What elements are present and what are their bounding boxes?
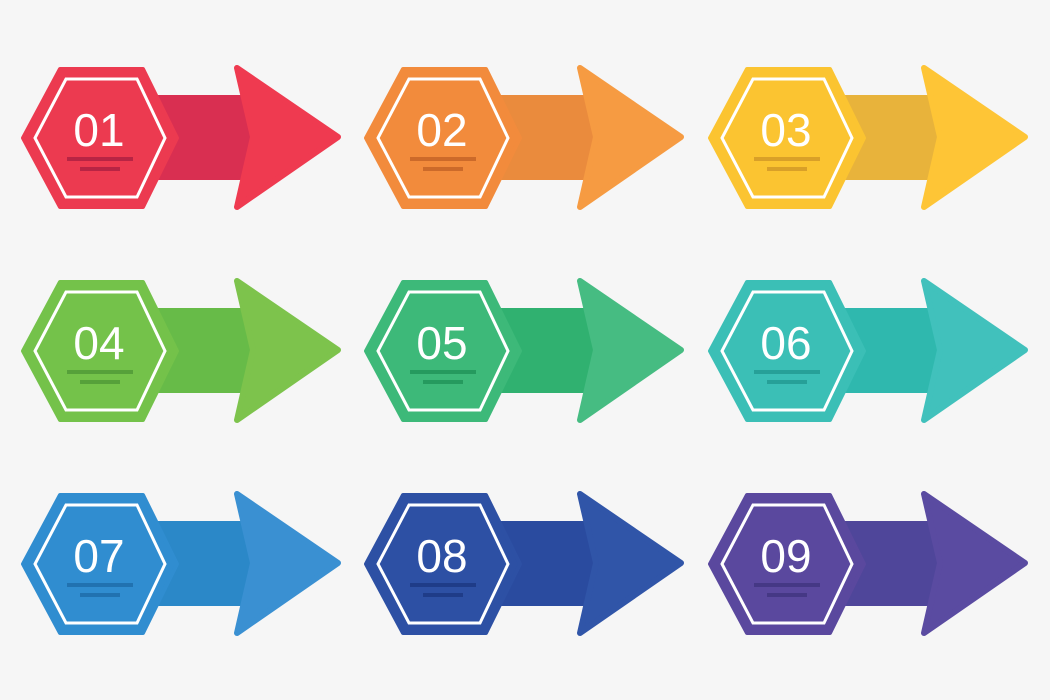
arrow 06 [710, 281, 1025, 420]
hex outline [722, 79, 852, 197]
arrow 02 [366, 68, 681, 207]
arrow 01 [23, 68, 338, 207]
shaft [493, 95, 598, 180]
hex outline [35, 292, 165, 410]
hexagon [366, 495, 520, 633]
number: 01 [73, 104, 125, 156]
number: 05 [416, 317, 468, 369]
arrowhead [237, 281, 338, 420]
hexagon [710, 69, 864, 207]
text lines [67, 583, 133, 597]
arrow 03 [710, 68, 1025, 207]
text lines [410, 370, 476, 384]
arrow 08 [366, 494, 681, 633]
number: 07 [73, 530, 125, 582]
shaft [837, 95, 942, 180]
shaft [493, 308, 598, 393]
arrow 04 [23, 281, 338, 420]
shaft [493, 521, 598, 606]
shaft [837, 308, 942, 393]
arrow 07 [23, 494, 338, 633]
hexagon [710, 495, 864, 633]
text lines [754, 157, 820, 171]
arrowhead [237, 494, 338, 633]
hex outline [378, 292, 508, 410]
hexagon [23, 495, 177, 633]
arrowhead [580, 494, 681, 633]
hexagon [366, 282, 520, 420]
hexagon [366, 69, 520, 207]
text lines [410, 583, 476, 597]
shaft [150, 521, 255, 606]
shaft [150, 308, 255, 393]
hexagon [23, 282, 177, 420]
arrowhead [924, 68, 1025, 207]
number: 09 [760, 530, 812, 582]
shaft [150, 95, 255, 180]
number: 06 [760, 317, 812, 369]
text lines [67, 157, 133, 171]
number: 03 [760, 104, 812, 156]
text lines [410, 157, 476, 171]
hexagon [23, 69, 177, 207]
text lines [754, 370, 820, 384]
text lines [67, 370, 133, 384]
hex outline [722, 505, 852, 623]
text lines [754, 583, 820, 597]
hex outline [378, 505, 508, 623]
arrowhead [237, 68, 338, 207]
number: 08 [416, 530, 468, 582]
arrowhead [924, 494, 1025, 633]
hex outline [35, 79, 165, 197]
hexagon [710, 282, 864, 420]
shaft [837, 521, 942, 606]
arrow 05 [366, 281, 681, 420]
hex outline [722, 292, 852, 410]
arrowhead [580, 281, 681, 420]
number: 02 [416, 104, 468, 156]
arrowhead [580, 68, 681, 207]
arrow 09 [710, 494, 1025, 633]
hex outline [35, 505, 165, 623]
number: 04 [73, 317, 125, 369]
hex outline [378, 79, 508, 197]
arrowhead [924, 281, 1025, 420]
